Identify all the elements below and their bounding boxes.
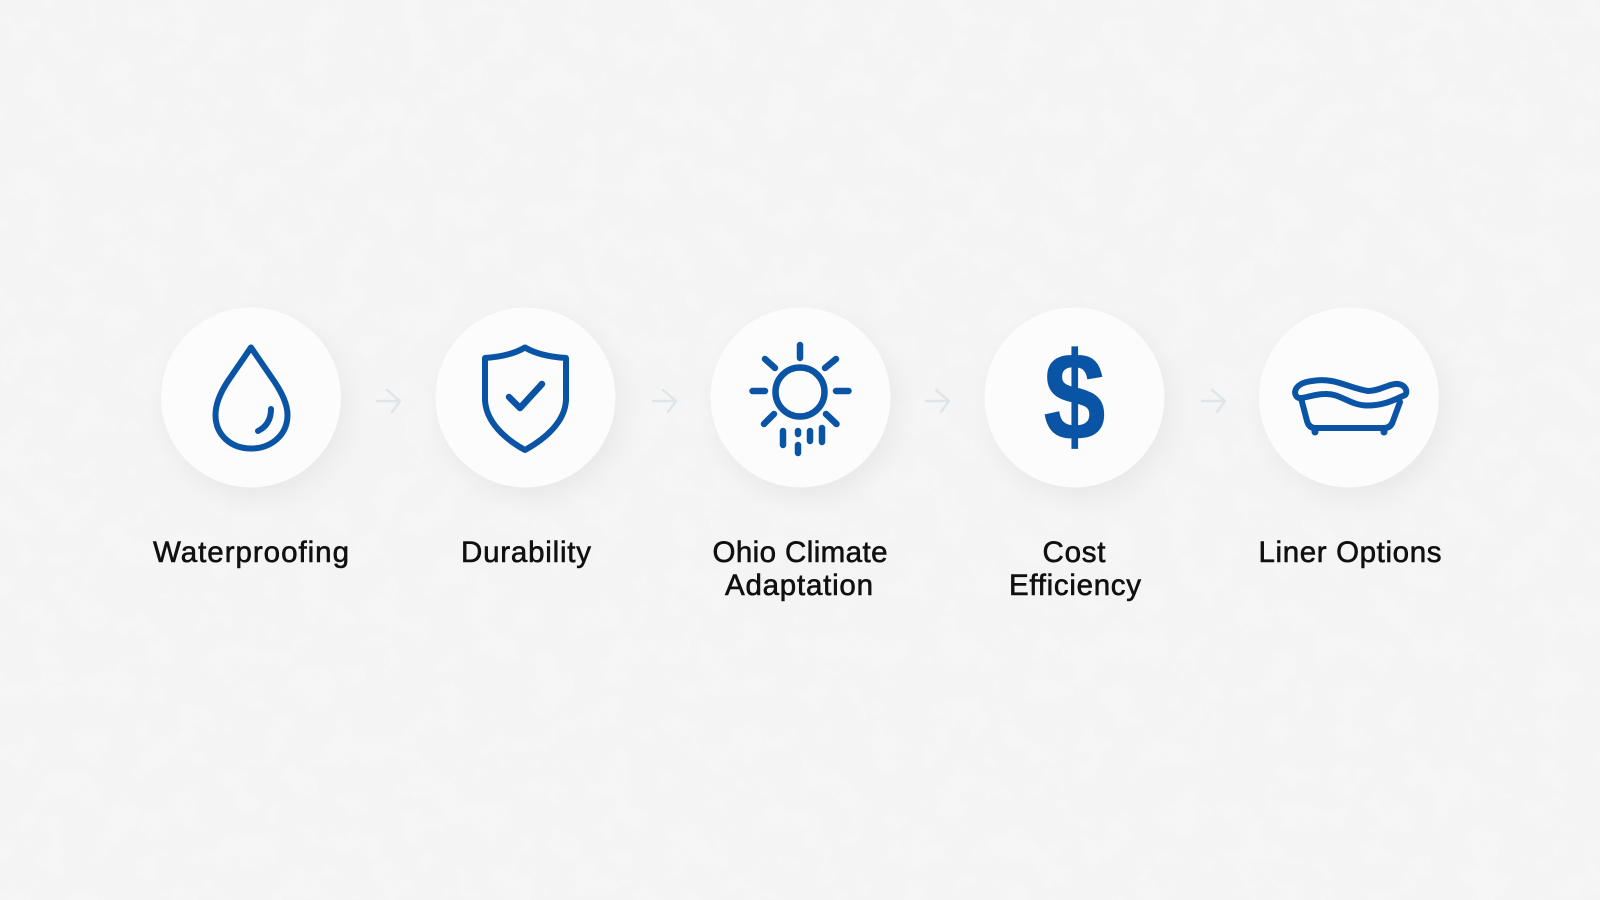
circle: Durability: [436, 308, 622, 498]
arrow: step 2 to 3: [653, 390, 676, 412]
icon: dollar sign: $: [1044, 327, 1105, 467]
label: Ohio Climate Adaptation: [712, 536, 888, 602]
label: Cost Efficiency: Cost: [1042, 536, 1106, 569]
step: Cost Efficiency: [984, 308, 1171, 602]
icon: bathtub: [1295, 380, 1406, 432]
step: Durability: [436, 308, 622, 569]
circle: Liner Options: [1259, 308, 1445, 498]
circle: Ohio Climate Adaptation: [710, 308, 897, 498]
step: Waterproofing: [153, 308, 349, 569]
label: Ohio Climate Adaptation: Ohio Climate: [712, 536, 888, 569]
label: Cost Efficiency: Efficiency: [1009, 569, 1141, 602]
arrow: step 3 to 4: [926, 390, 949, 412]
circle: Cost Efficiency: [984, 308, 1171, 498]
icon: water drop: [216, 348, 288, 448]
icon: sun and rain: [752, 345, 848, 453]
step: Liner Options: [1258, 308, 1445, 569]
label: Durability: Durability: [461, 536, 591, 569]
label: Cost Efficiency: [1009, 536, 1141, 602]
icon: shield with check: [485, 348, 566, 450]
arrow: step 1 to 2: [377, 390, 400, 412]
label: Liner Options: Liner Options: [1258, 536, 1442, 569]
step: Ohio Climate Adaptation: [710, 308, 897, 602]
circle: Waterproofing: [161, 308, 347, 498]
label: Waterproofing: Waterproofing: [153, 536, 349, 569]
label: Ohio Climate Adaptation: Adaptation: [725, 569, 873, 602]
arrow: step 4 to 5: [1202, 390, 1225, 412]
